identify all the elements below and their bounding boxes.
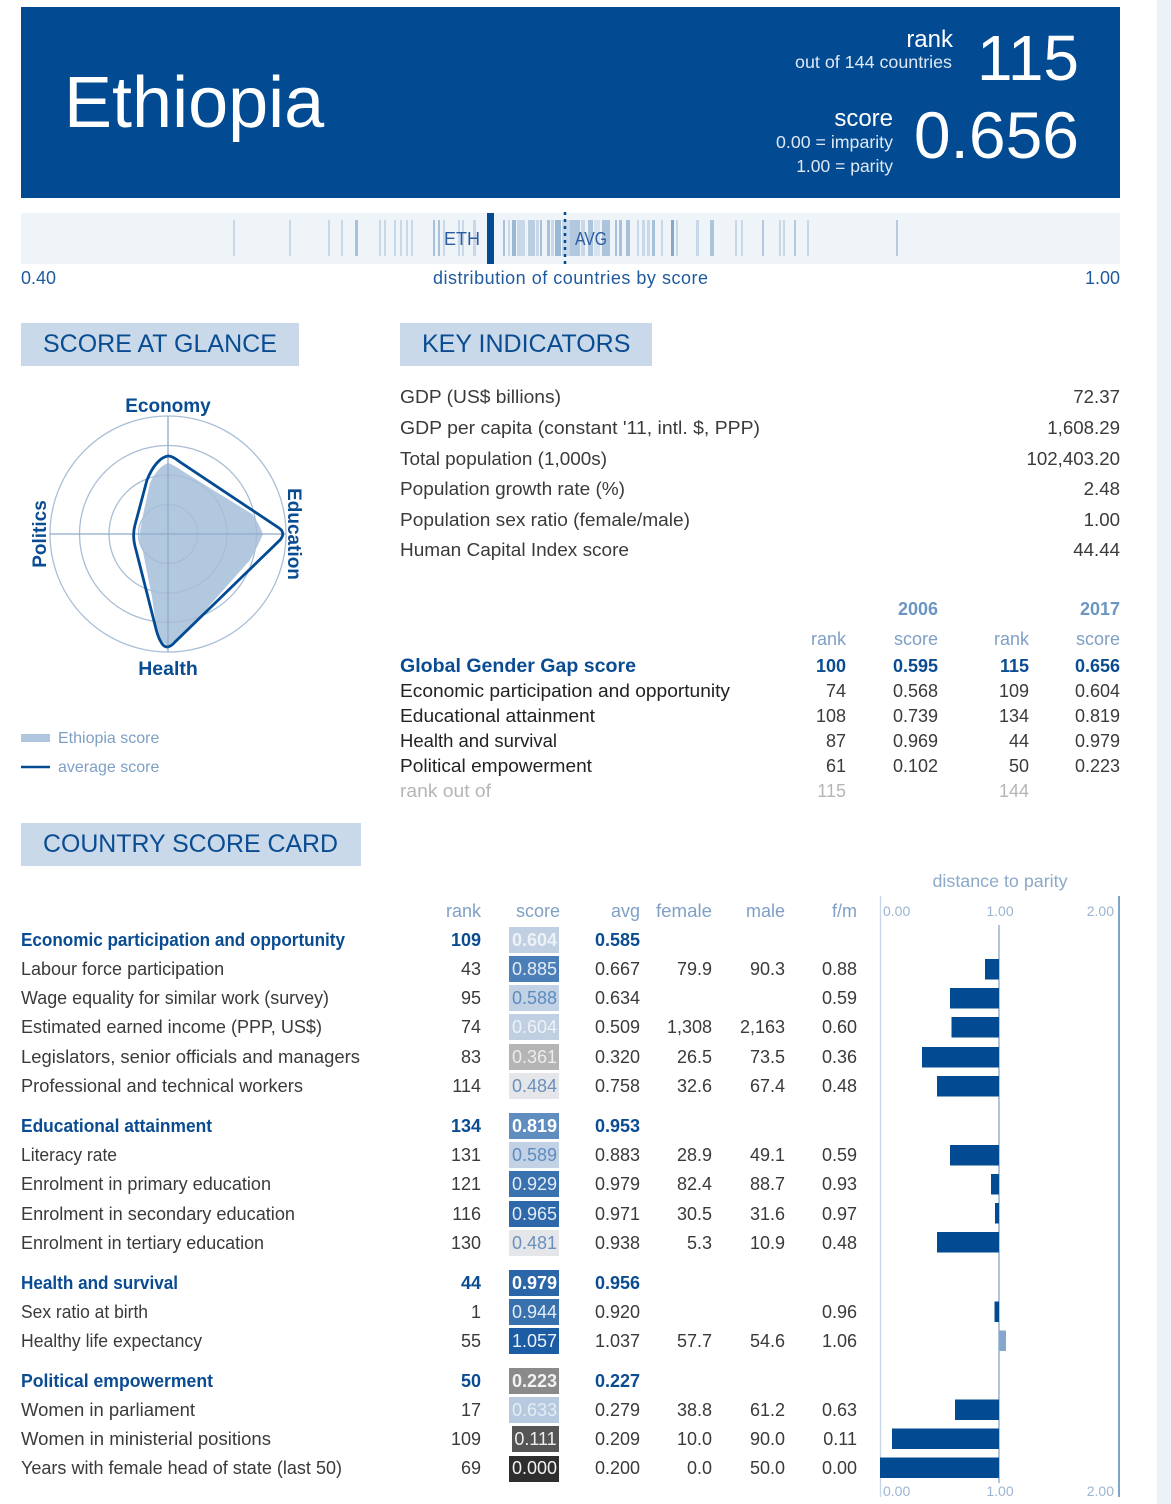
group: educational attainment: 0.93: [822, 1174, 857, 1194]
group: health and survival: [21, 1270, 857, 1354]
parity bars: [880, 959, 1006, 1478]
group: educational attainment: 49.1: [750, 1145, 785, 1165]
gender gap summary table: 0.604: [1075, 681, 1120, 701]
group: health and survival: 1.037: [595, 1331, 640, 1351]
score block: score: [834, 105, 893, 132]
axis label politics: Politics: [30, 500, 51, 568]
gender gap summary table: 109: [999, 681, 1029, 701]
group: economic participation: 32.6: [677, 1076, 712, 1096]
axis label economy: Economy: [125, 396, 211, 417]
group: political empowerment: 0.209: [595, 1429, 640, 1449]
chart caption: distance to parity: [932, 871, 1068, 891]
group: educational attainment: 116: [452, 1204, 481, 1224]
heading: key indicators: [400, 323, 652, 366]
group: educational attainment: 0.97: [822, 1204, 857, 1224]
gender gap summary table: 61: [826, 756, 846, 776]
group: educational attainment: Enrolment in primary education: [21, 1174, 271, 1194]
group: educational attainment: Enrolment in tertiary education: [21, 1233, 264, 1253]
rank block: [795, 22, 1079, 94]
group: health and survival: 0.979: [512, 1273, 557, 1293]
Ethiopia marker: [487, 213, 494, 264]
group: economic participation: 90.3: [750, 959, 785, 979]
group: political empowerment: 61.2: [750, 1400, 785, 1420]
gender gap summary table: 0.223: [1075, 756, 1120, 776]
gender gap summary table: Economic participation and opportunity: [400, 680, 731, 701]
group: political empowerment: 50.0: [750, 1458, 785, 1478]
group: economic participation: 0.758: [595, 1076, 640, 1096]
group: economic participation: Legislators, senior officials and managers: [21, 1047, 360, 1067]
group: political empowerment: 17: [461, 1400, 481, 1420]
gender gap summary table: 0.969: [893, 731, 938, 751]
group: educational attainment: 28.9: [677, 1145, 712, 1165]
key indicators list: 72.37: [1073, 386, 1120, 407]
group: political empowerment: Political empowerment: [21, 1371, 213, 1391]
group: educational attainment: 0.481: [512, 1233, 557, 1253]
group: economic participation: 95: [461, 988, 481, 1008]
group: economic participation: 79.9: [677, 959, 712, 979]
gender gap summary table: rank: [811, 629, 847, 649]
group: educational attainment: 0.883: [595, 1145, 640, 1165]
gender gap summary table: Political empowerment: [400, 755, 592, 776]
group: economic participation: 74: [461, 1017, 481, 1037]
gender gap summary table: 0.102: [893, 756, 938, 776]
key indicators list: Population growth rate (%): [400, 478, 625, 499]
group: educational attainment: 131: [451, 1145, 481, 1165]
group: economic participation: 73.5: [750, 1047, 785, 1067]
group: educational attainment: 0.48: [822, 1233, 857, 1253]
gender gap summary table: 0.568: [893, 681, 938, 701]
gender gap summary table: 2006: [898, 599, 938, 619]
gender gap summary table: [400, 599, 1120, 801]
group: economic participation: 26.5: [677, 1047, 712, 1067]
radar legend: [21, 730, 159, 776]
group: health and survival: 0.956: [595, 1273, 640, 1293]
score card column headers: rank: [446, 901, 482, 921]
group: educational attainment: 31.6: [750, 1204, 785, 1224]
group: economic participation: 43: [461, 959, 481, 979]
gender gap summary table: 74: [826, 681, 846, 701]
score block: 1.00 = parity: [796, 156, 893, 176]
gender gap summary table: Educational attainment: [400, 705, 595, 726]
group: health and survival: 1.057: [512, 1331, 557, 1351]
gender gap summary table: 108: [816, 706, 846, 726]
group: educational attainment: 30.5: [677, 1204, 712, 1224]
group: political empowerment: Women in ministerial positions: [21, 1429, 271, 1449]
group: political empowerment: 90.0: [750, 1429, 785, 1449]
group: educational attainment: 0.929: [512, 1174, 557, 1194]
group: political empowerment: 0.279: [595, 1400, 640, 1420]
group: health and survival: 1.06: [822, 1331, 857, 1351]
top axis labels: 0.00: [883, 903, 910, 919]
group: economic participation: Wage equality for similar work (survey): [21, 988, 329, 1008]
gender gap summary table: score: [1076, 629, 1120, 649]
group: educational attainment: 0.589: [512, 1145, 557, 1165]
group: educational attainment: 10.9: [750, 1233, 785, 1253]
score card column headers: [446, 901, 857, 921]
bottom axis labels: 0.00: [883, 1483, 910, 1499]
gender gap summary table: 100: [816, 656, 846, 676]
gender gap summary table: 44: [1009, 731, 1029, 751]
gender gap summary table: score: [894, 629, 938, 649]
score card column headers: female: [656, 901, 712, 921]
group: educational attainment: 121: [451, 1174, 481, 1194]
group: health and survival: Sex ratio at birth: [21, 1302, 148, 1322]
AVG label: AVG: [575, 229, 607, 249]
group: economic participation: Estimated earned income (PPP, US$): [21, 1017, 322, 1037]
group: health and survival: 0.920: [595, 1302, 640, 1322]
group: economic participation: 0.60: [822, 1017, 857, 1037]
score block: 0.656: [914, 98, 1079, 172]
score card column headers: male: [746, 901, 785, 921]
group: economic participation: Economic participation and opportunity: [21, 930, 345, 950]
group: political empowerment: Years with female head of state (last 50): [21, 1458, 342, 1478]
score card column headers: score: [516, 901, 560, 921]
radar legend: average score: [58, 759, 159, 776]
group: economic participation: 0.588: [512, 988, 557, 1008]
group: educational attainment: 130: [451, 1233, 481, 1253]
distribution strip: [21, 212, 1120, 288]
key indicators list: 44.44: [1073, 539, 1120, 560]
group: economic participation: 1,308: [667, 1017, 712, 1037]
key indicators list: Human Capital Index score: [400, 539, 629, 560]
axis min: 0.40: [21, 268, 56, 288]
group: economic participation: 67.4: [750, 1076, 785, 1096]
group: political empowerment: 38.8: [677, 1400, 712, 1420]
radar chart: [30, 396, 304, 680]
group: educational attainment: 0.971: [595, 1204, 640, 1224]
group: health and survival: 54.6: [750, 1331, 785, 1351]
gender gap summary table: Health and survival: [400, 730, 557, 751]
score block: 0.00 = imparity: [776, 132, 893, 152]
group: economic participation: Professional and technical workers: [21, 1076, 303, 1096]
group: economic participation: 0.484: [512, 1076, 557, 1096]
gender gap summary table: 50: [1009, 756, 1029, 776]
ETH label: ETH: [444, 229, 480, 249]
group: economic participation: 0.48: [822, 1076, 857, 1096]
header banner: [21, 7, 1120, 198]
Ethiopia score area: [140, 463, 263, 645]
gender gap summary table: rank: [994, 629, 1030, 649]
key indicators list: [400, 386, 1120, 560]
group: health and survival: 57.7: [677, 1331, 712, 1351]
group: educational attainment: Literacy rate: [21, 1145, 117, 1165]
group: educational attainment: 82.4: [677, 1174, 712, 1194]
score block: [776, 98, 1079, 176]
average marker: [564, 212, 566, 264]
group: economic participation: 2,163: [740, 1017, 785, 1037]
bottom axis labels: [883, 1483, 1114, 1499]
top axis labels: 2.00: [1087, 903, 1114, 919]
key indicators list: GDP per capita (constant '11, intl. $, PPP): [400, 417, 760, 438]
group: economic participation: [21, 927, 857, 1099]
group: educational attainment: [21, 1113, 857, 1256]
group: economic participation: 0.320: [595, 1047, 640, 1067]
group: health and survival: Healthy life expectancy: [21, 1331, 202, 1351]
key indicators list: Total population (1,000s): [400, 448, 607, 469]
average score outline: [134, 456, 283, 647]
group: health and survival: 55: [461, 1331, 481, 1351]
group: political empowerment: 69: [461, 1458, 481, 1478]
gender gap summary table: rank out of: [400, 781, 492, 801]
bottom axis labels: 1.00: [986, 1483, 1014, 1499]
group: economic participation: 83: [461, 1047, 481, 1067]
gender gap summary table: 134: [999, 706, 1029, 726]
group: political empowerment: 0.63: [822, 1400, 857, 1420]
group: political empowerment: 0.00: [822, 1458, 857, 1478]
group: economic participation: 0.604: [512, 1017, 557, 1037]
gender gap summary table: 115: [1000, 656, 1029, 676]
group: health and survival: 1: [471, 1302, 481, 1322]
group: economic participation: 0.585: [595, 930, 640, 950]
axis label health: Health: [138, 658, 198, 680]
group: economic participation: 0.36: [822, 1047, 857, 1067]
rank block: 115: [977, 22, 1079, 94]
key indicators list: 2.48: [1084, 478, 1120, 499]
gender gap summary table: 0.656: [1075, 656, 1120, 676]
rank block: rank: [906, 26, 954, 53]
group: political empowerment: 0.000: [512, 1458, 557, 1478]
group: educational attainment: 0.819: [512, 1116, 557, 1136]
key indicators list: GDP (US$ billions): [400, 386, 561, 407]
group: educational attainment: 0.965: [512, 1204, 557, 1224]
gender gap summary table: 0.595: [893, 656, 938, 676]
gender gap summary table: 144: [999, 781, 1029, 801]
key indicators list: 1,608.29: [1047, 417, 1120, 438]
group: educational attainment: 134: [451, 1116, 481, 1136]
group: educational attainment: 0.938: [595, 1233, 640, 1253]
key indicators list: 102,403.20: [1026, 448, 1120, 469]
group: economic participation: 0.667: [595, 959, 640, 979]
gender gap summary table: 2017: [1080, 599, 1120, 619]
score card rows: [21, 927, 857, 1482]
axis label education: Education: [283, 488, 304, 580]
gender gap summary table: 87: [826, 731, 846, 751]
group: educational attainment: 0.979: [595, 1174, 640, 1194]
group: educational attainment: 0.953: [595, 1116, 640, 1136]
country title: Ethiopia: [64, 63, 325, 143]
gender gap summary table: 0.739: [893, 706, 938, 726]
top axis labels: 1.00: [986, 903, 1014, 919]
gender gap summary table: 0.819: [1075, 706, 1120, 726]
group: economic participation: 0.634: [595, 988, 640, 1008]
group: political empowerment: [21, 1368, 857, 1482]
key indicators list: Population sex ratio (female/male): [400, 509, 690, 530]
heading: country score card: COUNTRY SCORE CARD: [43, 830, 338, 858]
group: economic participation: 0.604: [512, 930, 557, 950]
gender gap summary table: Global Gender Gap score: [400, 656, 636, 677]
group: political empowerment: 0.223: [512, 1371, 557, 1391]
group: political empowerment: 109: [451, 1429, 481, 1449]
group: educational attainment: Enrolment in secondary education: [21, 1204, 295, 1224]
group: educational attainment: 0.59: [822, 1145, 857, 1165]
group: health and survival: Health and survival: [21, 1273, 178, 1293]
rank block: out of 144 countries: [795, 52, 952, 72]
group: economic participation: 0.509: [595, 1017, 640, 1037]
group: economic participation: Labour force participation: [21, 959, 224, 979]
group: political empowerment: 0.11: [823, 1429, 857, 1449]
bottom axis labels: 2.00: [1087, 1483, 1114, 1499]
heading: country score card: [21, 823, 361, 866]
group: political empowerment: 0.111: [514, 1429, 557, 1449]
radar legend: Ethiopia score: [58, 730, 159, 747]
group: health and survival: 0.96: [822, 1302, 857, 1322]
score card column headers: avg: [611, 901, 640, 921]
group: political empowerment: 0.0: [687, 1458, 712, 1478]
group: economic participation: 0.88: [822, 959, 857, 979]
top axis labels: [883, 903, 1114, 919]
gender gap summary table: 115: [817, 781, 846, 801]
group: political empowerment: 0.227: [595, 1371, 640, 1391]
key indicators list: 1.00: [1084, 509, 1120, 530]
group: health and survival: 44: [461, 1273, 481, 1293]
heading: score at glance: SCORE AT GLANCE: [43, 330, 277, 358]
group: educational attainment: Educational attainment: [21, 1116, 212, 1136]
group: economic participation: 114: [452, 1076, 481, 1096]
group: educational attainment: 5.3: [687, 1233, 712, 1253]
heading: key indicators: KEY INDICATORS: [422, 330, 630, 358]
score card column headers: f/m: [832, 901, 857, 921]
group: economic participation: 0.59: [822, 988, 857, 1008]
group: economic participation: 0.361: [512, 1047, 557, 1067]
group: political empowerment: 10.0: [677, 1429, 712, 1449]
group: educational attainment: 88.7: [750, 1174, 785, 1194]
group: economic participation: 0.885: [512, 959, 557, 979]
group: political empowerment: 50: [461, 1371, 481, 1391]
group: economic participation: 109: [451, 930, 481, 950]
axis caption: distribution of countries by score: [433, 268, 708, 288]
group: political empowerment: 0.200: [595, 1458, 640, 1478]
group: political empowerment: 0.633: [512, 1400, 557, 1420]
group: health and survival: 0.944: [512, 1302, 557, 1322]
group: political empowerment: Women in parliament: [21, 1400, 195, 1420]
gender gap summary table: 0.979: [1075, 731, 1120, 751]
heading: score at glance: [21, 323, 299, 366]
distance to parity chart: [880, 871, 1119, 1499]
axis max: 1.00: [1085, 268, 1120, 288]
